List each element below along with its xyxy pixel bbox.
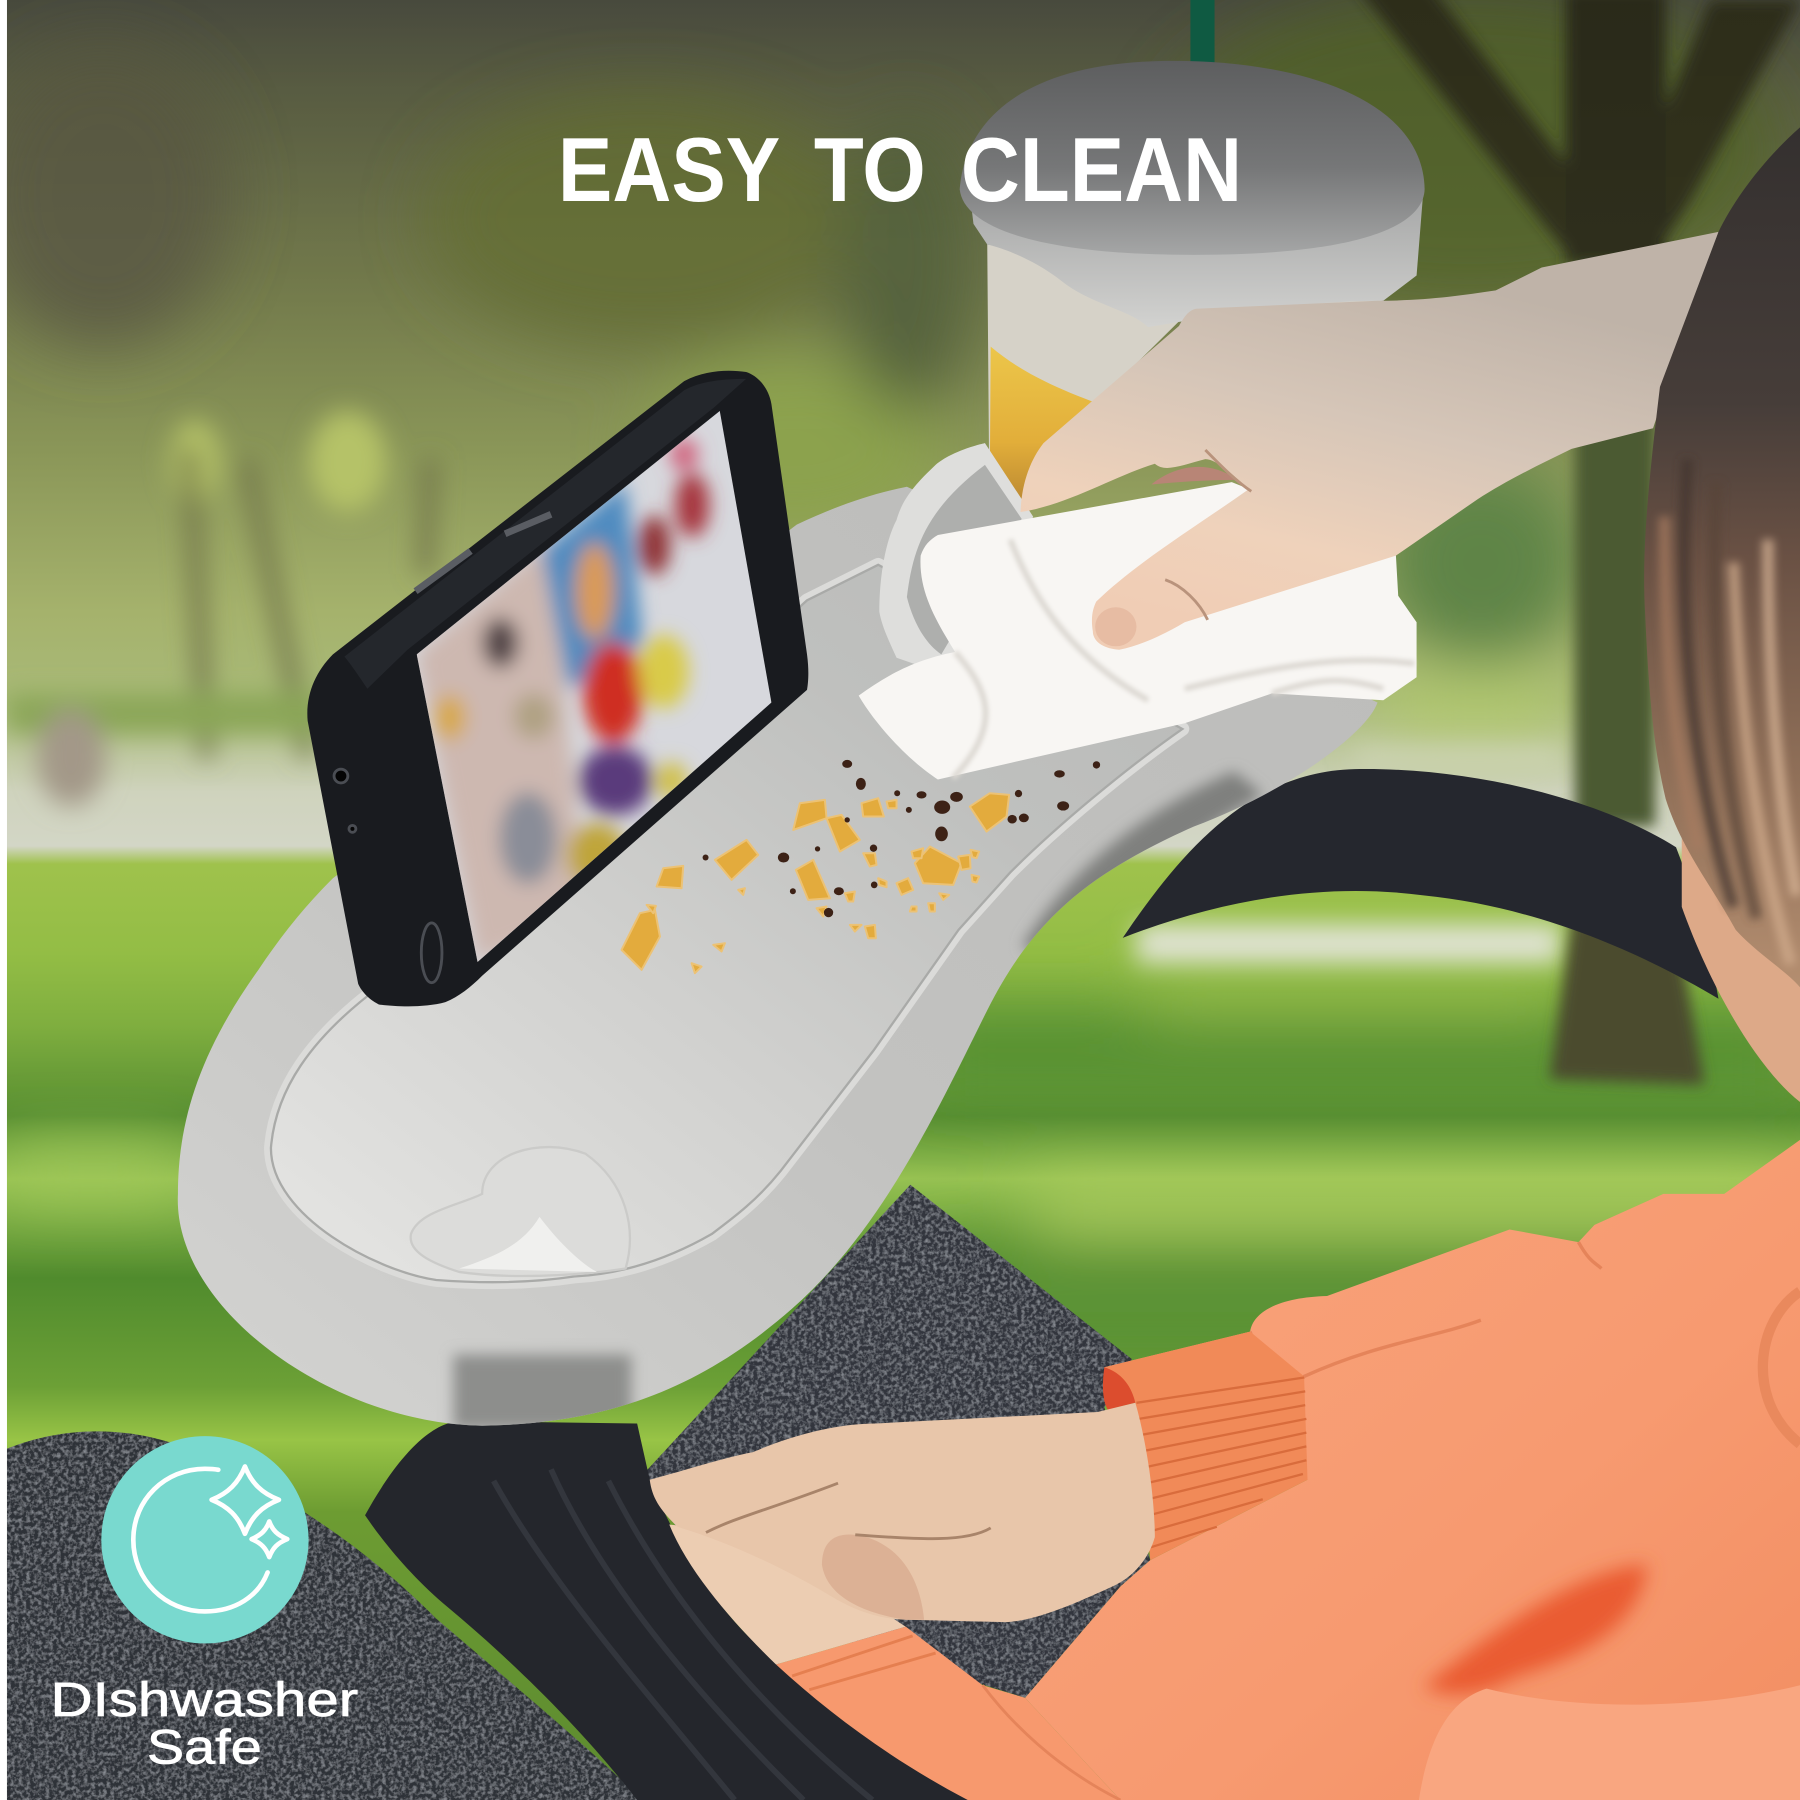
phone case highlight band (344, 379, 746, 689)
lower cuff and sleeve (776, 1627, 1120, 1800)
cup lid (960, 61, 1425, 255)
stroller handlebar (1123, 769, 1718, 999)
badge: dishwasher safe (51, 1436, 358, 1774)
phone screen with blurred video (416, 411, 772, 962)
drink cup (960, 0, 1425, 520)
crumbs on the tray (622, 760, 1100, 973)
child's orange sweatshirt (776, 1140, 1800, 1800)
shadow between fingers (1151, 467, 1238, 484)
straw (1190, 0, 1215, 142)
chest logo edge (1763, 1291, 1800, 1444)
hair (1644, 127, 1800, 987)
tray inner well (271, 565, 1182, 1282)
stroller snack tray (178, 443, 1378, 1429)
sweatshirt shadow fold (1423, 1565, 1647, 1694)
smartphone (307, 371, 808, 1006)
cup lid frill (970, 189, 1423, 327)
hair streaks (1665, 459, 1797, 964)
cloth folds (953, 540, 1414, 778)
cuff opening (1103, 1367, 1135, 1410)
badge label: DIshwasher (51, 1673, 358, 1727)
sleeve fold line (1250, 1242, 1601, 1386)
icon: plate with sparkles (101, 1436, 309, 1643)
adult arm and hand wiping (1021, 232, 1718, 650)
ribbed cuff (1104, 1332, 1308, 1560)
drink liquid (990, 347, 1096, 520)
legs in dark leggings (7, 1185, 1150, 1800)
lower sleeve fold (1419, 1685, 1800, 1800)
tray well step highlight (271, 565, 1182, 1282)
face (1682, 551, 1800, 1102)
phone camera and ports (334, 769, 442, 983)
badge: dishwasher safe: Safe (147, 1720, 262, 1774)
heart shaped recess (411, 1147, 630, 1276)
phone body (307, 371, 808, 1006)
sleeve seam (983, 1685, 1120, 1800)
white cleaning cloth (859, 482, 1417, 779)
hand creases (706, 1483, 991, 1539)
title: EASY TO CLEAN (558, 120, 1242, 221)
thumb nail and creases (1095, 607, 1136, 646)
stroller lower bar (365, 1421, 970, 1800)
tray outer rim (178, 487, 1378, 1426)
tray rim shadows (453, 1355, 631, 1429)
phone side buttons (416, 514, 551, 591)
child's head and hair (1644, 127, 1800, 1102)
thumb (822, 1535, 924, 1620)
left white strip (0, 0, 7, 1800)
cup body (987, 245, 1383, 520)
child's hands (650, 1403, 1155, 1665)
cup holder (879, 443, 1033, 677)
